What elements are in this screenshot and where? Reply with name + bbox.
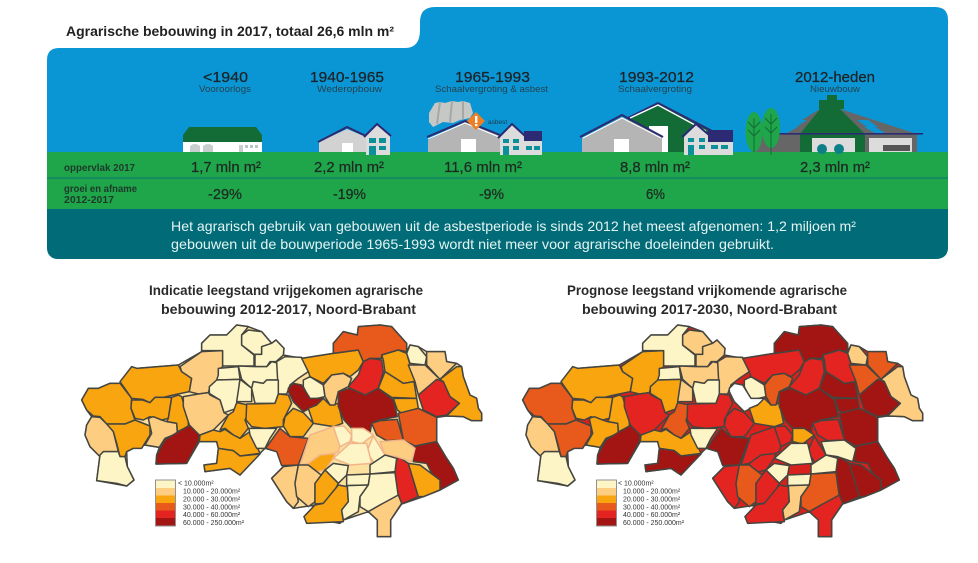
legend: right map: 40.000 - 60.000m²	[623, 512, 681, 519]
heading: right map: bebouwing 2017-2030, Noord-Brabant	[582, 301, 837, 317]
surface values: 1,7 mln m²	[191, 159, 261, 176]
period headings: Vooroorlogs	[199, 84, 251, 95]
conclusion text	[171, 218, 856, 252]
period headings	[199, 69, 875, 95]
green data band	[47, 152, 948, 209]
period headings: 1965-1993	[455, 69, 530, 86]
icon: asbestos-era farm	[427, 101, 542, 155]
surface values: 8,8 mln m²	[620, 159, 690, 176]
legend: right map: < 10.000m²	[618, 480, 654, 488]
period headings: 1940-1965	[310, 69, 384, 86]
legend: left map: 60.000 - 250.000m²	[183, 520, 245, 527]
panel background	[47, 7, 948, 259]
map: vacancy 2012-2017	[82, 325, 482, 537]
legend: right map: 60.000 - 250.000m²	[623, 520, 685, 527]
province silhouette	[82, 325, 482, 537]
period headings: Wederopbouw	[317, 84, 382, 95]
legend: left map: 40.000 - 60.000m²	[183, 512, 241, 519]
title: Agrarische bebouwing in 2017, totaal 26,6 mln m²	[66, 23, 394, 39]
growth values: -29%	[208, 186, 242, 203]
legend: right map	[596, 480, 685, 527]
legend: left map: 10.000 - 20.000m²	[183, 488, 241, 496]
heading: left map: bebouwing 2012-2017, Noord-Brabant	[161, 301, 416, 317]
legend: right map: 30.000 - 40.000m²	[623, 504, 681, 512]
province silhouette	[523, 325, 923, 537]
icon: warning diamond	[467, 112, 485, 130]
row label: growth: groei en afname	[64, 184, 137, 195]
period headings: Nieuwbouw	[810, 84, 860, 95]
panel: building periods	[47, 7, 948, 259]
period headings: 2012-heden	[795, 69, 875, 86]
conclusion text: gebouwen uit de bouwperiode 1965-1993 wordt niet meer voor agrarische doeleinden gebruikt.	[171, 236, 774, 252]
icon: post-war farm	[318, 124, 391, 155]
row label: surface: oppervlak 2017	[64, 163, 135, 174]
legend: right map: 10.000 - 20.000m²	[623, 488, 681, 496]
conclusion text: Het agrarisch gebruik van gebouwen uit de asbestperiode is sinds 2012 het meest afgenomen: 1,2 miljoen m²	[171, 218, 856, 234]
heading: left map	[149, 282, 423, 317]
period headings: <1940	[203, 69, 248, 86]
surface values: 2,3 mln m²	[800, 159, 870, 176]
period headings: Schaalvergroting & asbest	[435, 84, 548, 95]
legend: left map: 20.000 - 30.000m²	[183, 496, 241, 504]
growth values: -9%	[479, 186, 504, 203]
icon: large-scale farm	[580, 103, 733, 155]
period headings: 1993-2012	[619, 69, 694, 86]
row label: growth	[64, 184, 137, 206]
heading: left map: Indicatie leegstand vrijgekomen agrarische	[149, 282, 423, 298]
growth values	[208, 186, 665, 203]
surface values	[191, 159, 870, 176]
map: prognosis 2017-2030	[523, 325, 923, 537]
legend: left map	[156, 480, 245, 527]
growth values: 6%	[646, 186, 665, 203]
growth values: -19%	[333, 186, 366, 203]
surface values: 2,2 mln m²	[314, 159, 384, 176]
heading: right map	[567, 282, 847, 317]
row label: growth: 2012-2017	[64, 195, 114, 206]
legend: left map: < 10.000m²	[178, 480, 214, 488]
icon: new-build farm with trees	[746, 95, 923, 155]
legend: right map: 20.000 - 30.000m²	[623, 496, 681, 504]
asbestos label: asbest	[488, 119, 507, 126]
teal conclusion band	[47, 209, 948, 259]
icon: pre-war farm	[183, 127, 262, 152]
period headings: Schaalvergroting	[618, 84, 692, 95]
icon: corrugated asbestos sheet	[429, 101, 473, 127]
heading: right map: Prognose leegstand vrijkomende agrarische	[567, 282, 847, 298]
legend: left map: 30.000 - 40.000m²	[183, 504, 241, 512]
surface values: 11,6 mln m²	[444, 159, 522, 176]
